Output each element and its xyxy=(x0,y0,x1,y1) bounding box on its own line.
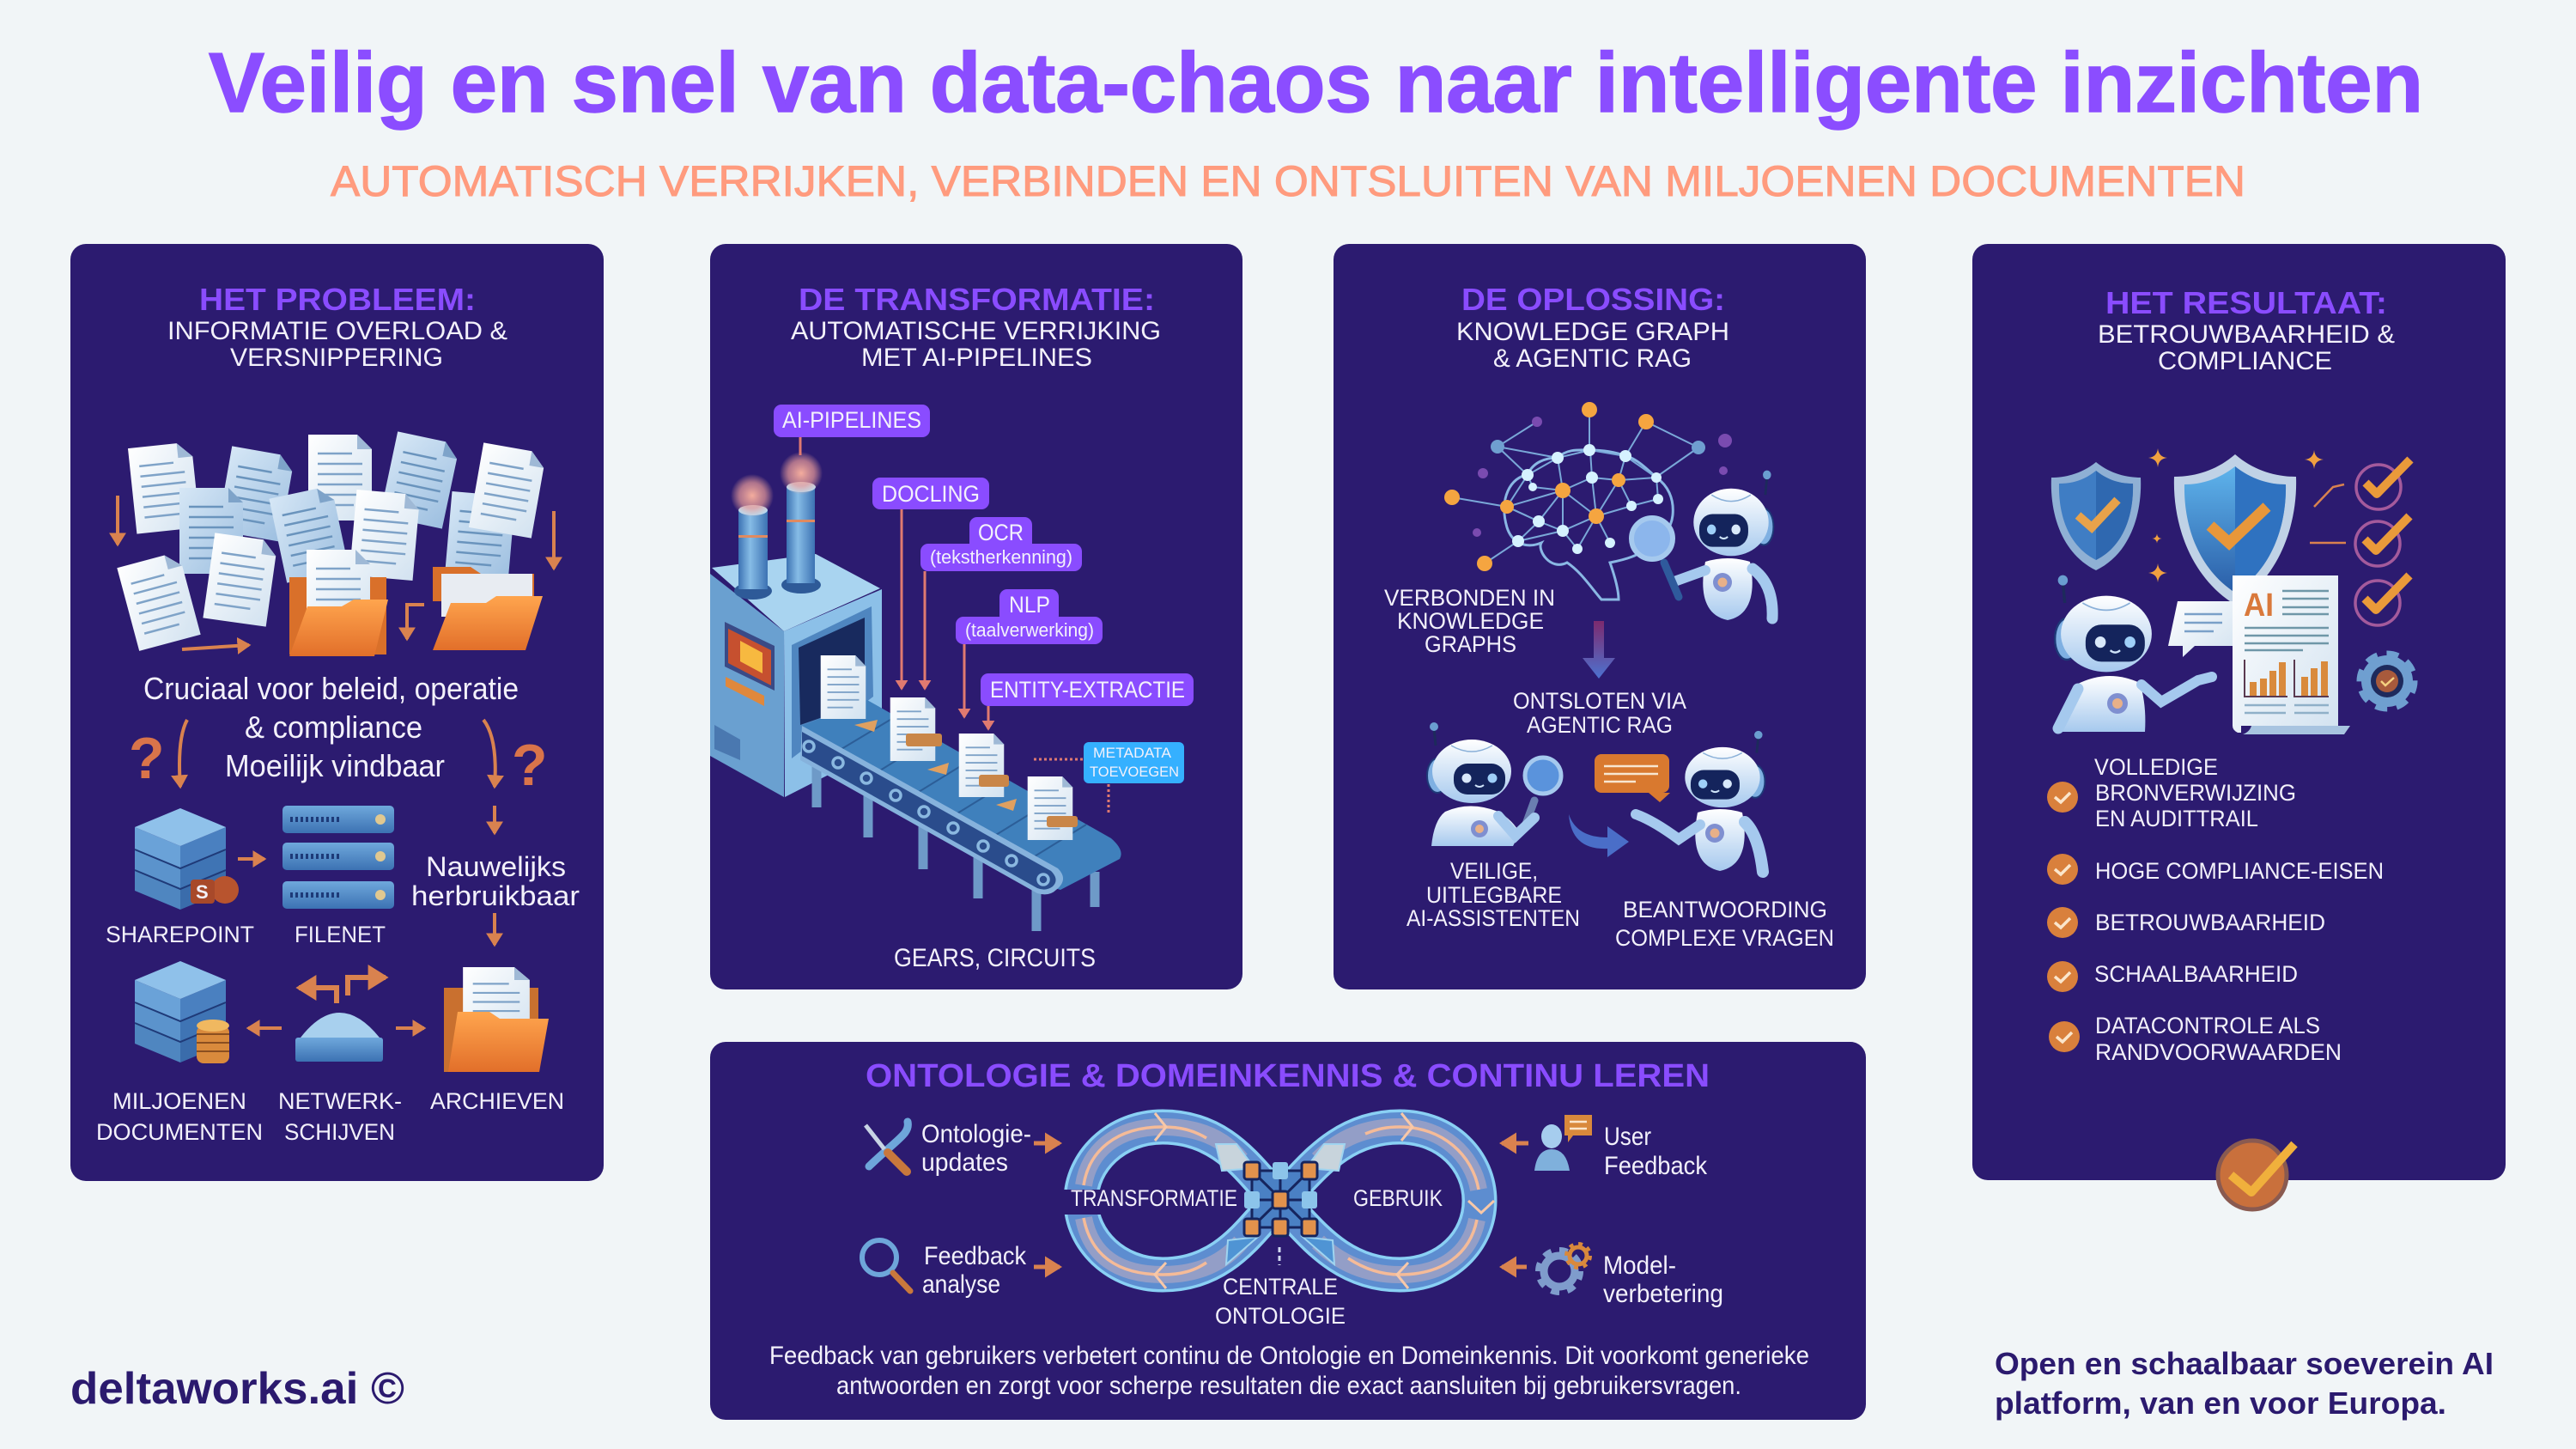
label: beantwoording complexe vragen: BEANTWOORDING xyxy=(1623,897,1827,922)
tagline: Open en schaalbaar soeverein AI xyxy=(1995,1346,2494,1381)
text: importance: Moeilijk vindbaar xyxy=(225,748,445,783)
icon: scattered documents xyxy=(117,431,546,651)
icon: robot presenter xyxy=(2055,575,2212,732)
label: ontologie-updates: updates xyxy=(921,1148,1008,1177)
icon: open folder xyxy=(433,567,543,650)
icon: question marks: ? xyxy=(129,726,165,791)
icon: speech bubble xyxy=(1595,754,1670,802)
checklist: BRONVERWIJZING xyxy=(2095,780,2296,806)
panel: het probleem xyxy=(70,244,604,1181)
label: ocr: OCR xyxy=(978,520,1024,545)
arrow: to loop xyxy=(1502,1264,1527,1269)
panel heading: COMPLIANCE xyxy=(2158,347,2332,375)
panel heading: HET PROBLEEM: xyxy=(199,282,476,317)
arrows between documents xyxy=(118,496,554,945)
label: modelverbetering: Model- xyxy=(1603,1251,1676,1280)
labels: miljoenen documenten, netwerkschijven, archieven: MILJOENEN xyxy=(112,1088,246,1114)
icon: wrench and screwdriver xyxy=(866,1122,908,1172)
panel heading: KNOWLEDGE GRAPH xyxy=(1456,318,1729,346)
central ontology network xyxy=(1061,1162,1317,1265)
icon: archive folder xyxy=(444,967,549,1072)
icon: ai report document: AI xyxy=(2244,588,2274,624)
panel: ontologie en continu leren xyxy=(710,1042,1866,1420)
label: filenet: FILENET xyxy=(295,922,386,947)
icon: filenet server xyxy=(283,806,394,909)
label: veilige assistenten: VEILIGE, xyxy=(1450,858,1538,884)
panel heading: INFORMATIE OVERLOAD & xyxy=(167,317,507,345)
text: feedback description xyxy=(769,1342,1809,1400)
icon: ai report document xyxy=(2233,575,2350,734)
labels: miljoenen documenten, netwerkschijven, archieven: NETWERK- xyxy=(278,1088,402,1114)
labels: loop sides xyxy=(1071,1185,1443,1211)
labels: loop sides: TRANSFORMATIE xyxy=(1071,1185,1237,1211)
checklist: EN AUDITTRAIL xyxy=(2095,806,2258,831)
panel heading xyxy=(2098,285,2395,375)
panel heading: MET AI-PIPELINES xyxy=(861,344,1092,372)
icon: brain knowledge graph xyxy=(1444,402,1732,600)
checklist: RANDVOORWAARDEN xyxy=(2095,1039,2342,1065)
label: veilige assistenten: UITLEGBARE xyxy=(1426,882,1562,908)
panel heading: BETROUWBAARHEID & xyxy=(2098,320,2395,349)
label: user feedback: Feedback xyxy=(1604,1152,1708,1180)
label: user feedback xyxy=(1604,1123,1708,1180)
label: ai-pipelines: AI-PIPELINES xyxy=(782,407,921,433)
label: nlp: NLP xyxy=(1009,592,1050,618)
title: Veilig en snel van data-chaos naar intelligente inzichten xyxy=(209,35,2423,130)
infinity loop xyxy=(1081,1113,1494,1288)
icon: small shield xyxy=(2051,462,2141,570)
label: docling: DOCLING xyxy=(882,481,980,507)
icon: robot with magnifier xyxy=(1631,471,1773,620)
checklist: VOLLEDIGE xyxy=(2094,754,2218,780)
label: feedback analyse: Feedback xyxy=(924,1242,1027,1270)
labels: miljoenen documenten, netwerkschijven, archieven xyxy=(96,1088,564,1145)
subtitle: AUTOMATISCH VERRIJKEN, VERBINDEN EN ONTSLUITEN VAN MILJOENEN DOCUMENTEN xyxy=(331,157,2245,205)
labels: miljoenen documenten, netwerkschijven, archieven: DOCUMENTEN xyxy=(96,1119,263,1145)
checklist xyxy=(2047,754,2384,1065)
label: modelverbetering xyxy=(1603,1251,1723,1308)
tagline: platform, van en voor Europa. xyxy=(1995,1385,2446,1421)
label: verbonden in knowledge graphs: KNOWLEDGE xyxy=(1397,608,1544,634)
label: centrale ontologie xyxy=(1215,1274,1346,1329)
label: feedback analyse: analyse xyxy=(922,1270,1000,1299)
label: ontsloten via agentic rag: AGENTIC RAG xyxy=(1527,712,1673,738)
labels: loop sides: GEBRUIK xyxy=(1353,1185,1443,1211)
panel background xyxy=(710,1042,1866,1420)
panel background xyxy=(710,244,1242,989)
label: beantwoording complexe vragen xyxy=(1615,897,1834,951)
label: veilige assistenten xyxy=(1406,858,1580,931)
icon: user feedback xyxy=(1534,1115,1592,1171)
icon: network drive with arrows xyxy=(248,977,424,1062)
checklist: BETROUWBAARHEID xyxy=(2095,910,2325,935)
icon: large check badge xyxy=(2218,1141,2294,1209)
label: ontsloten via agentic rag: ONTSLOTEN VIA xyxy=(1513,688,1686,714)
icon: open folder with document xyxy=(289,550,388,656)
icon: question marks: ? xyxy=(512,733,548,798)
arrow: to loop xyxy=(1034,1264,1060,1269)
text: importance: & compliance xyxy=(245,709,422,745)
label: centrale ontologie: CENTRALE xyxy=(1223,1274,1338,1300)
label: ocr: (tekstherkenning) xyxy=(930,546,1072,568)
text: nauwelijks herbruikbaar: Nauwelijks xyxy=(426,851,566,882)
panel heading xyxy=(1456,282,1729,373)
label: metadata toevoegen: METADATA xyxy=(1093,745,1172,761)
brand footer: deltaworks.ai © xyxy=(70,1364,404,1414)
label: nlp: (taalverwerking) xyxy=(965,619,1094,641)
label: centrale ontologie: ONTOLOGIE xyxy=(1215,1303,1346,1329)
icon: robot answering xyxy=(1636,731,1765,872)
label: ontsloten via agentic rag xyxy=(1513,688,1686,738)
arrow: to loop xyxy=(1502,1141,1528,1146)
panel heading xyxy=(167,282,507,372)
panel heading: HET RESULTAAT: xyxy=(2105,285,2387,320)
text: nauwelijks herbruikbaar xyxy=(411,851,580,911)
text: feedback description: Feedback van gebruikers verbetert continu de Ontologie en Domeinkennis. Dit voorkomt generieke xyxy=(769,1342,1809,1370)
label: verbonden in knowledge graphs xyxy=(1384,585,1555,657)
labels: miljoenen documenten, netwerkschijven, archieven: ARCHIEVEN xyxy=(430,1088,564,1114)
icon: gear xyxy=(2360,654,2415,709)
text: importance: Cruciaal voor beleid, operatie xyxy=(143,671,519,706)
icon: magnifier xyxy=(862,1240,910,1291)
labels: miljoenen documenten, netwerkschijven, archieven: SCHIJVEN xyxy=(284,1119,395,1145)
icon: factory xyxy=(710,452,882,797)
panel heading xyxy=(791,282,1161,372)
text: nauwelijks herbruikbaar: herbruikbaar xyxy=(411,880,580,911)
arrow: sharepoint to filenet xyxy=(238,857,264,861)
text: feedback description: antwoorden en zorgt voor scherpe resultaten die exact aansluiten bij gebruikersvragen. xyxy=(836,1372,1741,1400)
arrow: to loop xyxy=(1034,1141,1060,1146)
icon: question marks xyxy=(129,726,548,798)
icon: sparkles xyxy=(2148,448,2324,582)
panel background xyxy=(1334,244,1866,989)
icon: server with coins xyxy=(135,961,229,1063)
panel heading: ONTOLOGIE & DOMEINKENNIS & CONTINU LEREN xyxy=(866,1058,1710,1094)
icon: speech bubble xyxy=(2168,601,2234,657)
label: beantwoording complexe vragen: COMPLEXE VRAGEN xyxy=(1615,925,1834,951)
label: gears, circuits: GEARS, CIRCUITS xyxy=(894,944,1096,972)
label: metadata toevoegen xyxy=(1084,742,1184,783)
panel: de oplossing xyxy=(1334,244,1866,989)
panel heading: VERSNIPPERING xyxy=(230,344,443,372)
panel background xyxy=(1972,244,2506,1180)
icon: documents on belt xyxy=(821,655,1078,840)
label: sharepoint: SHAREPOINT xyxy=(106,922,254,947)
label: modelverbetering: verbetering xyxy=(1603,1280,1723,1308)
label: user feedback: User xyxy=(1604,1123,1651,1151)
panel heading: AUTOMATISCHE VERRIJKING xyxy=(791,317,1161,345)
panel background xyxy=(70,244,604,1181)
label: verbonden in knowledge graphs: GRAPHS xyxy=(1425,631,1516,657)
checklist: HOGE COMPLIANCE-EISEN xyxy=(2095,858,2384,884)
label: ontologie-updates: Ontologie- xyxy=(921,1120,1031,1148)
label: ontologie-updates xyxy=(921,1120,1031,1177)
panel: de transformatie xyxy=(710,1,1242,989)
label: feedback analyse xyxy=(922,1242,1027,1299)
label: veilige assistenten: AI-ASSISTENTEN xyxy=(1406,905,1580,931)
icon: sharepoint server: S xyxy=(196,881,209,903)
label: entity-extractie: ENTITY-EXTRACTIE xyxy=(990,677,1185,703)
checklist: SCHAALBAARHEID xyxy=(2094,961,2298,987)
icon: robot assistant with magnifier xyxy=(1427,722,1561,846)
icon: conveyor belt xyxy=(800,1,1121,931)
connector lines xyxy=(800,437,1109,814)
text: importance xyxy=(143,671,519,783)
icon: curved arrow xyxy=(1569,814,1629,857)
label: verbonden in knowledge graphs: VERBONDEN IN xyxy=(1384,585,1555,611)
icon: sharepoint server xyxy=(135,808,239,910)
panel: het resultaat xyxy=(1972,244,2506,1180)
icon: check circles xyxy=(2310,460,2410,625)
label: ocr xyxy=(920,517,1082,571)
panel heading: & AGENTIC RAG xyxy=(1493,344,1692,373)
icon: large shield xyxy=(2174,454,2296,605)
tagline xyxy=(1995,1346,2494,1421)
panel heading: DE TRANSFORMATIE: xyxy=(799,282,1155,317)
icon: gears xyxy=(1538,1244,1590,1293)
label: metadata toevoegen: TOEVOEGEN xyxy=(1090,764,1179,780)
checklist: DATACONTROLE ALS xyxy=(2095,1013,2320,1038)
label: nlp xyxy=(956,589,1103,644)
panel heading: DE OPLOSSING: xyxy=(1461,282,1725,317)
arrow: down xyxy=(1583,621,1615,679)
